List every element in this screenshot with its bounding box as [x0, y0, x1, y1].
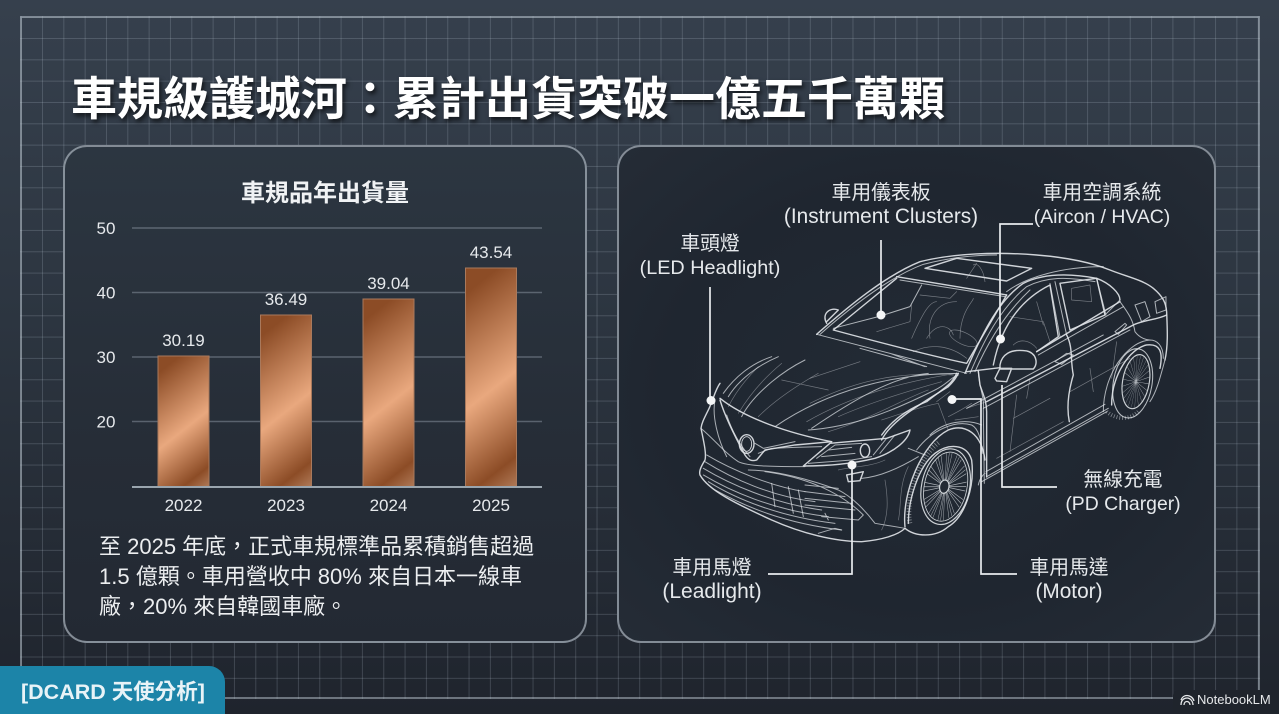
x axis labels: 2025 [472, 496, 510, 515]
label: LED headlight: 車頭燈 [680, 233, 740, 255]
bar value labels: 43.54 [470, 243, 512, 262]
label: leadlight: (Leadlight) [662, 580, 762, 603]
callout leader lines and dots [706, 223, 1057, 575]
title: 車規級護城河：累計出貨突破一億五千萬顆 [71, 73, 945, 125]
text block: shipment summary: 廠，20% 來自韓國車廠。 [99, 594, 347, 619]
leader: LED headlight [706, 287, 716, 405]
label: leadlight: 車用馬燈 [672, 557, 752, 579]
rear tyre [1107, 412, 1138, 418]
bar value labels: 30.19 [162, 331, 205, 350]
bar value labels: 36.49 [265, 290, 307, 309]
leader: PD charger [1002, 385, 1057, 487]
panel: annual shipments [63, 145, 587, 643]
label: aircon: (Aircon / HVAC) [1034, 206, 1170, 228]
car cabin and rear section [807, 253, 1167, 482]
label: aircon [1034, 182, 1170, 228]
label: motor: 車用馬達 [1029, 557, 1109, 579]
watermark [1173, 690, 1279, 714]
label: LED headlight: (LED Headlight) [640, 257, 780, 279]
label: aircon: 車用空調系統 [1043, 182, 1161, 204]
bar value labels: 39.04 [367, 274, 410, 293]
text block: shipment summary [99, 534, 534, 619]
car front section [700, 357, 985, 542]
bar chart: annual automotive shipments [96, 180, 542, 515]
panel: automotive applications [617, 145, 1216, 643]
front tyre tread [909, 442, 940, 523]
label: instrument clusters: (Instrument Clusters) [784, 205, 978, 228]
source tag: [DCARD 天使分析] [21, 680, 205, 704]
label: PD charger: (PD Charger) [1065, 493, 1181, 515]
y axis labels [97, 219, 115, 432]
source tag [0, 666, 225, 714]
bar value labels [162, 243, 512, 350]
text block: shipment summary: 1.5 億顆。車用營收中 80% 來自日本一線車 [99, 564, 522, 589]
y axis labels: 20 [97, 412, 115, 432]
watermark: NotebookLM [1197, 692, 1271, 707]
y axis labels: 30 [97, 348, 115, 367]
y axis labels: 50 [97, 219, 115, 238]
bars [158, 268, 516, 487]
x axis labels: 2024 [370, 496, 407, 515]
illustration: car wireframe [699, 252, 1168, 542]
rear wheel rim [1118, 352, 1154, 411]
leader: instrument clusters [876, 240, 886, 320]
x axis labels: 2023 [267, 496, 305, 515]
leader: aircon [996, 224, 1033, 344]
label: instrument clusters: 車用儀表板 [832, 182, 930, 204]
leader: motor [948, 395, 1017, 574]
text block: shipment summary: 至 2025 年底，正式車規標準品累積銷售超過 [99, 534, 534, 559]
leader: leadlight [768, 460, 856, 574]
front wheel rim [914, 444, 977, 529]
label: motor: (Motor) [1035, 580, 1103, 603]
x axis labels: 2022 [165, 496, 202, 515]
label: PD charger [1065, 469, 1181, 515]
chart title: 車規品年出貨量 [241, 180, 409, 207]
label: leadlight [662, 557, 762, 603]
label: LED headlight [640, 233, 780, 279]
y axis labels: 40 [97, 284, 115, 302]
label: instrument clusters [784, 182, 978, 228]
label: PD charger: 無線充電 [1083, 469, 1163, 491]
label: motor [1029, 557, 1109, 603]
x axis labels [165, 496, 510, 515]
